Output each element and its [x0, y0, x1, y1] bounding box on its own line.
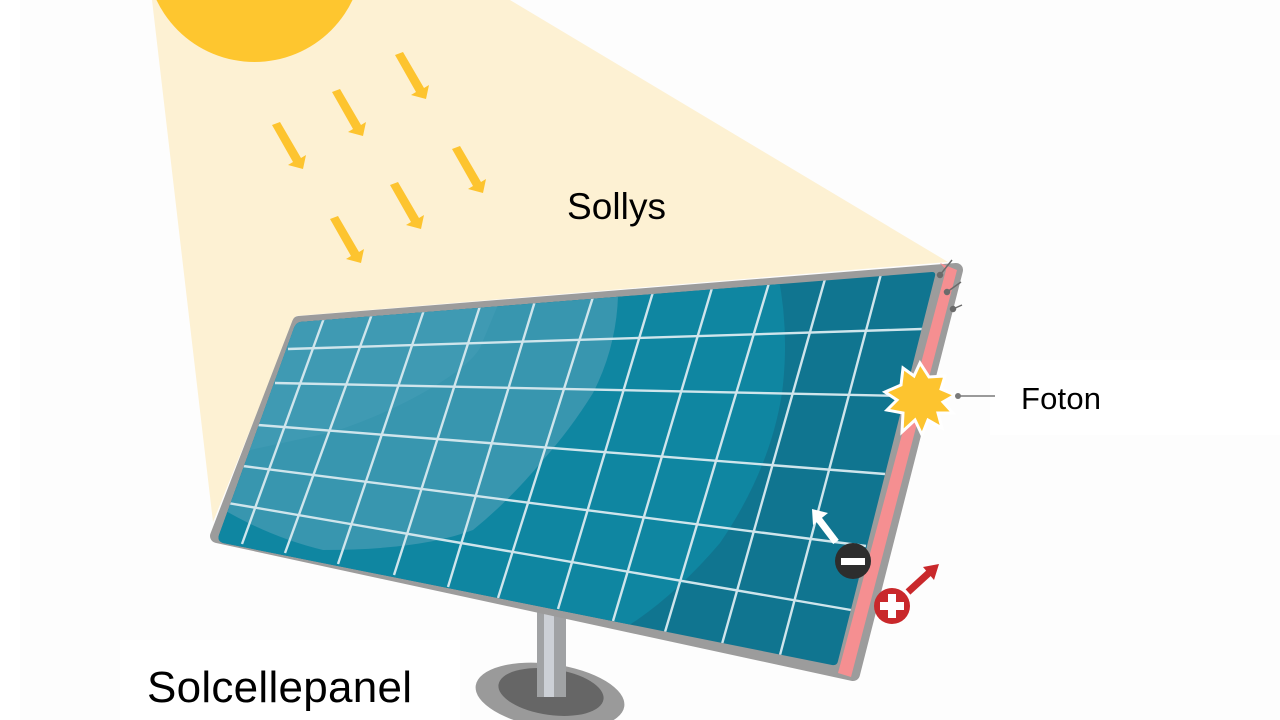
sunlight beam — [152, 0, 948, 522]
label: Solcellepanel: Solcellepanel — [147, 663, 412, 712]
sun — [146, 0, 363, 62]
stand base — [471, 654, 629, 720]
hole arrow — [908, 564, 939, 592]
stand pole — [537, 605, 566, 697]
hole: plus charge — [874, 588, 910, 624]
electron: minus charge — [835, 543, 871, 579]
label: Sollys: Sollys — [567, 186, 666, 227]
photon leader line — [955, 393, 995, 399]
solar panel diagram — [149, 0, 1099, 720]
stand — [471, 605, 629, 720]
electron arrow — [812, 509, 836, 542]
panel glass — [218, 272, 936, 666]
solar panel — [200, 260, 962, 680]
panel frame — [217, 270, 956, 674]
label: Foton: Foton — [1021, 381, 1101, 416]
sun ray arrows — [272, 52, 486, 263]
pink cell edge — [838, 263, 957, 677]
grid lines — [228, 274, 922, 655]
wires — [938, 260, 962, 312]
photon starburst — [885, 363, 955, 435]
